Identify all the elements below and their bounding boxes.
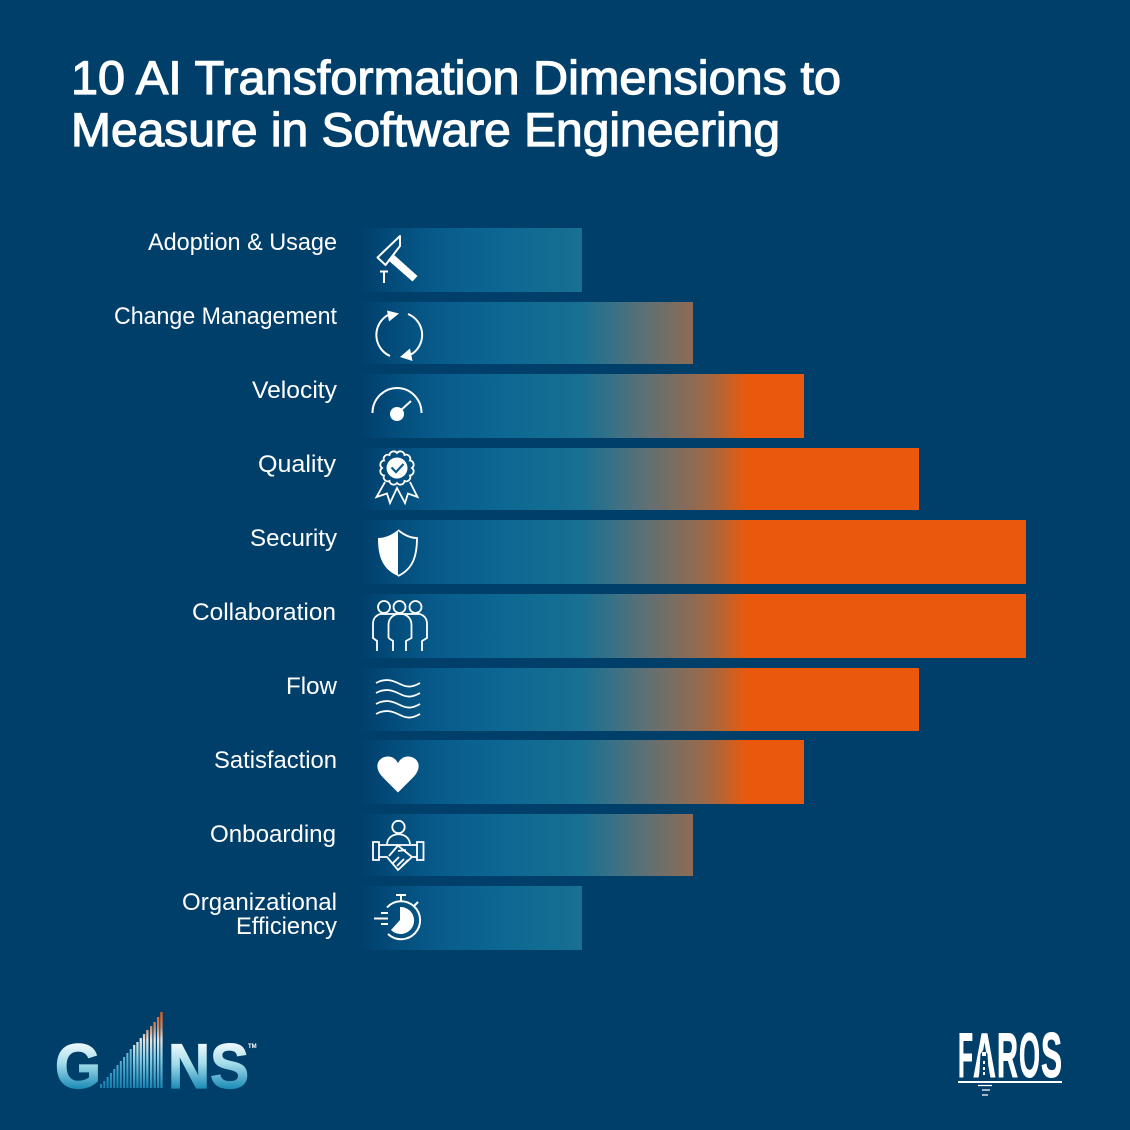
- label: Organizational Efficiency: Organizational: [182, 889, 337, 916]
- title: [71, 51, 841, 156]
- label: Flow: Flow: [286, 673, 338, 700]
- lighthouse reflection: [978, 1086, 992, 1095]
- wordmark: F: [958, 1021, 973, 1091]
- labels: [114, 229, 338, 940]
- label: Collaboration: Collaboration: [192, 599, 336, 626]
- label: Satisfaction: Satisfaction: [214, 747, 337, 774]
- bar: Adoption & Usage: [362, 228, 582, 292]
- label: Quality: Quality: [258, 451, 336, 478]
- wordmark: [958, 1021, 1062, 1091]
- icon: stopwatch: [374, 895, 420, 939]
- wordmark: R: [997, 1021, 1018, 1091]
- infographic canvas: S: [1041, 1021, 1062, 1091]
- bar: Velocity: [362, 374, 804, 438]
- label: Organizational Efficiency: [182, 889, 337, 940]
- waterline: [958, 1081, 1062, 1083]
- icon: handshake with person: [373, 821, 424, 870]
- wordmark: O: [1019, 1021, 1040, 1091]
- bar: Onboarding: [362, 814, 693, 876]
- lighthouse cutout: [979, 1049, 989, 1078]
- label: Onboarding: Onboarding: [210, 821, 336, 848]
- logo letters NS: NS: [168, 1032, 249, 1102]
- bar chart: [362, 228, 1026, 950]
- wordmark: A: [973, 1021, 996, 1091]
- bar: Change Management: [362, 302, 693, 364]
- icon: team of three people: [373, 601, 427, 651]
- label: Organizational Efficiency: Efficiency: [236, 913, 337, 940]
- logo trademark: TM: [248, 1044, 257, 1050]
- icon: cycle arrows: [376, 310, 422, 361]
- icon: speedometer gauge: [372, 388, 422, 421]
- label: Security: Security: [250, 525, 337, 552]
- bar: Quality: [362, 448, 919, 510]
- bar: Organizational Efficiency: [362, 886, 582, 950]
- bar: Collaboration: [362, 594, 1026, 658]
- label: Adoption & Usage: Adoption & Usage: [148, 229, 337, 256]
- bar: Security: [362, 520, 1026, 584]
- icon: award ribbon: [376, 451, 418, 503]
- logo rising bars: [100, 1012, 163, 1088]
- label: Change Management: Change Management: [114, 303, 337, 330]
- icon: hammer and cursor: [378, 236, 418, 283]
- logo: FAROS: [958, 1021, 1062, 1095]
- icon: heart: [377, 756, 419, 792]
- icon: waves: [376, 680, 420, 718]
- bar: Flow: [362, 668, 919, 731]
- logo: GAINS: [55, 1012, 257, 1102]
- title: 10 AI Transformation Dimensions to: [71, 51, 841, 104]
- bar: Satisfaction: [362, 740, 804, 804]
- logo letter G: G: [55, 1032, 101, 1102]
- title: Measure in Software Engineering: [71, 103, 780, 156]
- label: Velocity: Velocity: [252, 377, 337, 404]
- icon: shield: [378, 530, 417, 576]
